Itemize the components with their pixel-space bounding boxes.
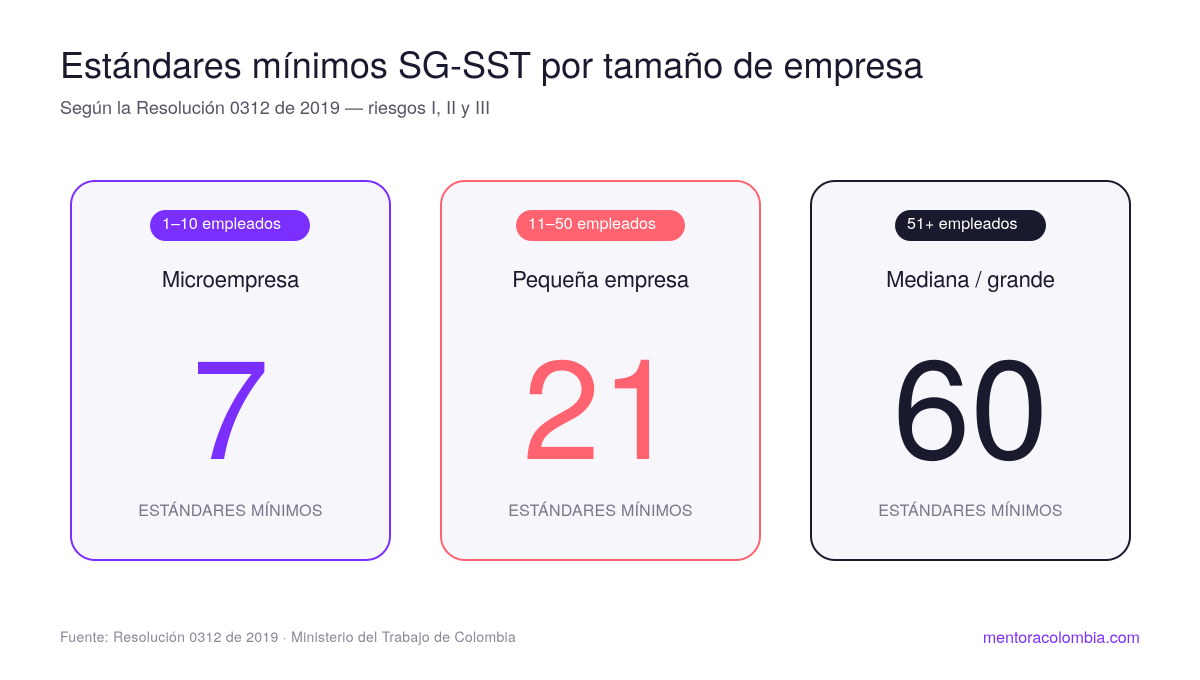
number: 7 — [192, 298, 269, 499]
caption: ESTÁNDARES MÍNIMOS — [878, 498, 1063, 521]
badge: 51+ empleados — [895, 210, 1046, 241]
badge: 11–50 empleados — [516, 210, 685, 241]
badge: 1–10 empleados: 1–10 empleados — [162, 211, 281, 234]
caption: ESTÁNDARES MÍNIMOS — [508, 498, 693, 521]
source note: Fuente: Resolución 0312 de 2019 · Ministerio del Trabajo de Colombia — [60, 626, 516, 646]
title: Estándares mínimos SG-SST por tamaño de empresa — [60, 38, 923, 89]
number: 21 — [523, 298, 678, 499]
caption: ESTÁNDARES MÍNIMOS — [138, 498, 323, 521]
card name: Mediana / grande — [886, 263, 1055, 294]
panel: microempresa — [70, 180, 391, 561]
card name: Microempresa — [162, 263, 299, 294]
badge: 51+ empleados: 51+ empleados — [907, 211, 1018, 234]
card name: Pequeña empresa — [512, 263, 689, 294]
badge: 11–50 empleados: 11–50 empleados — [528, 211, 656, 234]
subtitle: Según la Resolución 0312 de 2019 — riesgos I, II y III — [60, 94, 490, 120]
badge: 1–10 empleados — [150, 210, 310, 241]
number: 60 — [893, 298, 1048, 499]
panel: pequeña empresa — [440, 180, 761, 561]
website link: mentoracolombia.com — [983, 625, 1140, 648]
panel: mediana / grande — [810, 180, 1131, 561]
